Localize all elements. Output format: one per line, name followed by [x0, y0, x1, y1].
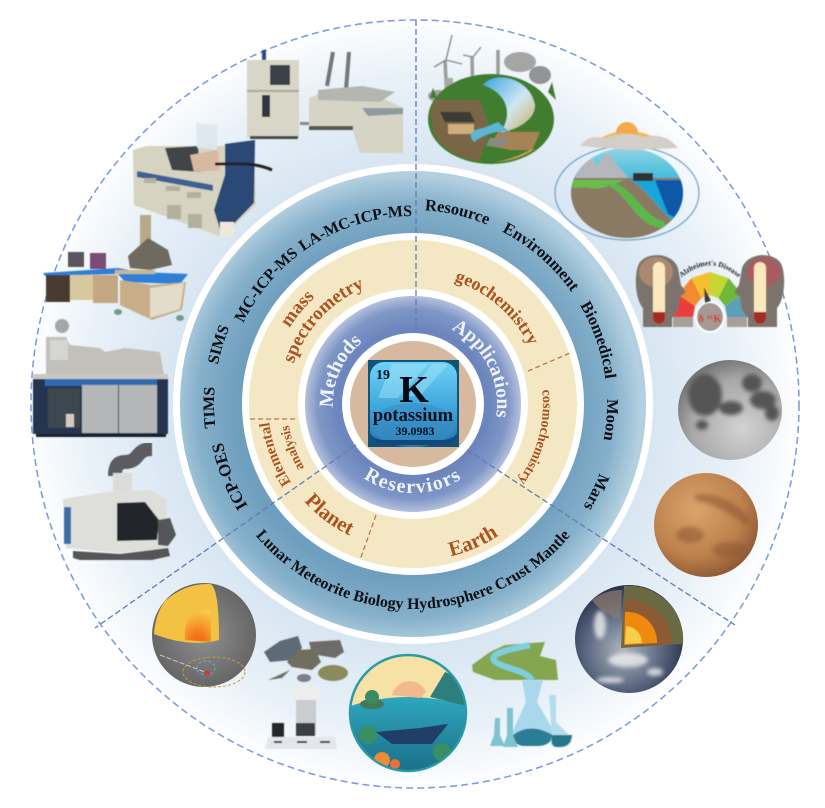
technique labels: TIMS [204, 388, 216, 429]
label: geochemistry: geochemistry [454, 274, 536, 343]
illustration: Alzheimer's disease gauge [635, 254, 785, 333]
instrument: SIMS on blue desk [43, 215, 188, 321]
application labels [425, 200, 618, 510]
label: Planet: Planet [304, 492, 354, 536]
label: spectrometry: spectrometry [286, 280, 361, 364]
illustration: Alzheimer's disease gauge: δ ⁴¹K [698, 313, 722, 325]
element tile: potassium [368, 360, 459, 447]
illustration: Earth with cutaway core [575, 585, 683, 693]
illustration: powder vial on scale [265, 686, 337, 749]
instrument: ICP-OES [63, 449, 176, 560]
illustration: Moon [678, 360, 782, 460]
technique labels: MC-ICP-MS [234, 248, 297, 323]
application labels: Moon [604, 399, 618, 440]
instrument: LA-MC-ICP-MS [247, 50, 403, 153]
label: Earth: Earth [447, 526, 498, 556]
instrument: mass spectrometer with blue casing [133, 123, 272, 237]
technique labels: ICP-OES [212, 444, 248, 512]
illustration: biology ocean scene [350, 655, 466, 775]
panel: central beige disc [350, 341, 476, 467]
element tile: potassium: K [399, 369, 429, 411]
label: Reserviors: Reserviors [364, 466, 460, 493]
sub-section dividers [250, 353, 570, 560]
label: Elemental: Elemental [259, 422, 291, 488]
reservoir labels: Lunar Meteorite Biology Hydrosphere Crust Mantle [256, 528, 570, 612]
panel: techniques and targets ring [173, 164, 653, 644]
label: cosmochemistry: cosmochemistry [518, 390, 550, 484]
label: Methods: Methods [320, 336, 361, 408]
element tile: potassium: 39.0983 [396, 424, 434, 438]
application labels: Mars [584, 473, 610, 510]
element tile: potassium: potassium [373, 406, 454, 426]
technique labels: LA-MC-ICP-MS [298, 206, 412, 252]
section dividers [95, 20, 735, 628]
technique labels [204, 206, 412, 512]
illustration: Mars [654, 473, 758, 577]
instrument: MC-ICP-MS [33, 319, 168, 437]
illustration: planetary cutaway [152, 583, 256, 687]
illustration: resource globe with wind turbines [428, 35, 556, 165]
panel: methods applications reservoirs ring [298, 289, 528, 519]
illustration: Alzheimer's disease gauge: Alzheimet's Disease [680, 260, 741, 278]
illustration: meteorite rocks [264, 636, 348, 682]
application labels: Biomedical [580, 300, 616, 379]
illustration: water cycle globe [555, 122, 699, 240]
application labels: Resource [425, 200, 489, 224]
illustration: water sample flasks [490, 680, 572, 747]
technique labels: SIMS [208, 325, 228, 364]
label: analysis: analysis [281, 426, 304, 470]
label: mass: mass [282, 292, 314, 328]
label: Applications: Applications [452, 321, 508, 417]
element tile: potassium: 19 [376, 368, 390, 383]
application labels: Environment [502, 222, 578, 292]
panel: disciplines ring [249, 240, 577, 568]
illustration: river landscape [472, 642, 558, 680]
